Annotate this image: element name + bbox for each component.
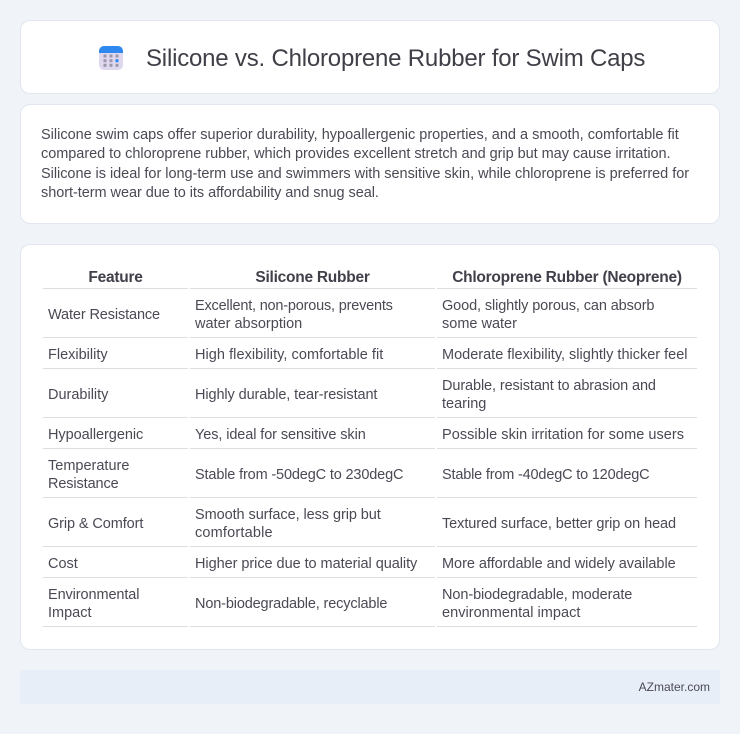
header: Silicone Rubber: Silicone Rubber (255, 269, 370, 286)
footer text: AZmater.com (639, 680, 710, 694)
title card (20, 20, 720, 94)
comparison table: Stable from -50degC to 230degC (195, 467, 403, 483)
comparison table: More affordable and widely available (442, 556, 676, 572)
comparison table: tearing (442, 396, 486, 412)
description text: short-term wear due to its affordability and snug seal. (41, 185, 379, 201)
comparison table: Highly durable, tear-resistant (195, 387, 377, 403)
comparison table: Resistance (48, 476, 119, 492)
comparison table: Moderate flexibility, slightly thicker feel (442, 347, 688, 363)
table card (20, 244, 720, 650)
title: Silicone vs. Chloroprene Rubber for Swim Caps (146, 45, 645, 72)
description card (20, 104, 720, 224)
header: Feature: Feature (88, 269, 143, 286)
comparison table: water absorption (195, 316, 302, 332)
comparison table: environmental impact (442, 605, 580, 621)
row: Water Resistance: Water Resistance (48, 307, 160, 323)
comparison table: Stable from -40degC to 120degC (442, 467, 649, 483)
comparison table: Smooth surface, less grip but (195, 507, 381, 523)
comparison table: Good, slightly porous, can absorb (442, 298, 654, 314)
description text: Silicone swim caps offer superior durability, hypoallergenic properties, and a smooth, comfortable fit (41, 127, 679, 143)
footer bar (20, 670, 720, 704)
comparison table: Durable, resistant to abrasion and (442, 378, 656, 394)
icon: calendar (99, 46, 123, 70)
description text (41, 127, 689, 201)
comparison table: Non-biodegradable, recyclable (195, 596, 387, 612)
row: Durability: Durability (48, 387, 108, 403)
comparison table: Higher price due to material quality (195, 556, 417, 572)
comparison table: Textured surface, better grip on head (442, 516, 676, 532)
comparison table: comfortable (195, 525, 273, 541)
description text: compared to chloroprene rubber, which provides excellent stretch and grip but may cause irritation. (41, 146, 671, 162)
comparison table: High flexibility, comfortable fit (195, 347, 383, 363)
row: Hypoallergenic: Hypoallergenic (48, 427, 143, 443)
row: Environmental Impact: Environmental (48, 587, 139, 603)
comparison table: Non-biodegradable, moderate (442, 587, 632, 603)
row: Grip & Comfort: Grip & Comfort (48, 516, 143, 532)
comparison table: Excellent, non-porous, prevents (195, 298, 393, 314)
row: Flexibility: Flexibility (48, 347, 108, 363)
comparison table: Possible skin irritation for some users (442, 427, 684, 443)
comparison table (43, 269, 697, 627)
comparison table: Impact (48, 605, 92, 621)
row: Temperature Resistance: Temperature (48, 458, 129, 474)
header: Chloroprene Rubber: Chloroprene Rubber (Neoprene) (452, 269, 682, 286)
comparison table: some water (442, 316, 517, 332)
comparison table: Yes, ideal for sensitive skin (195, 427, 366, 443)
description text: Silicone is ideal for long-term use and swimmers with sensitive skin, while chloroprene is preferred for (41, 166, 689, 182)
row: Cost: Cost (48, 556, 78, 572)
